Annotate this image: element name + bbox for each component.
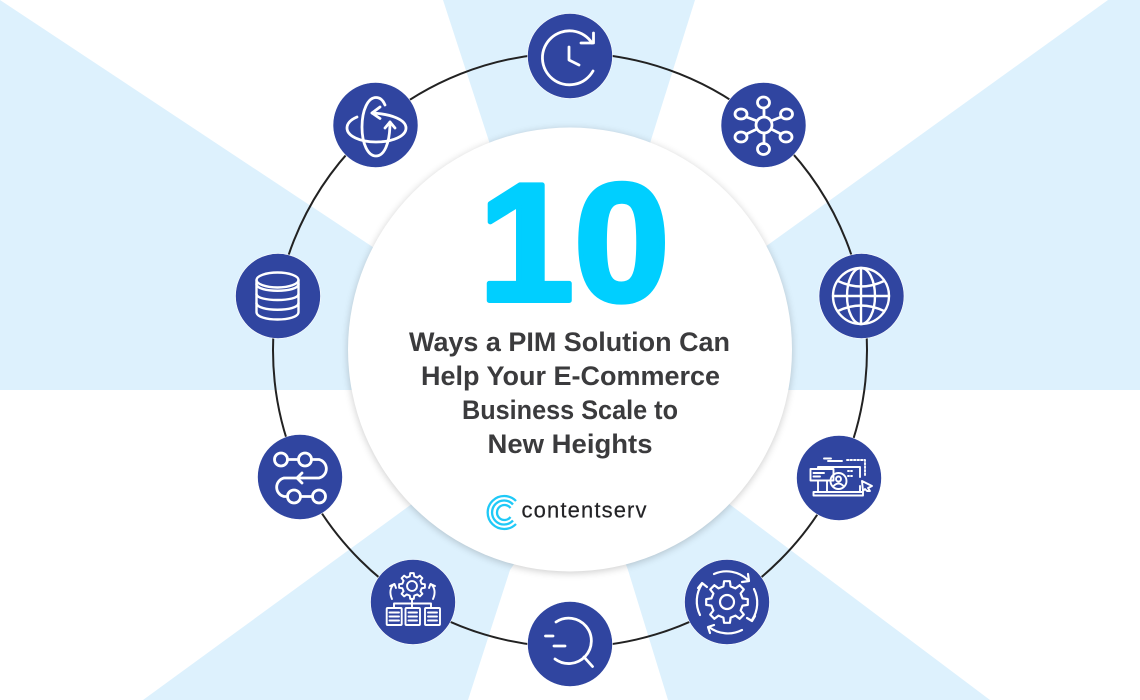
icon: workflow path — [258, 434, 342, 520]
logo: contentserv: contentserv — [522, 498, 646, 522]
icon: network hub — [721, 82, 806, 168]
icon: clock with arrow — [528, 14, 612, 98]
ring connecting icons — [273, 53, 867, 647]
icon: gear with rotating arrows — [684, 560, 770, 644]
big number 10: 10 — [478, 148, 670, 336]
icon: rotation orbit — [333, 82, 418, 168]
heading: Ways a PIM Solution Can — [409, 327, 730, 357]
heading: New Heights — [488, 429, 652, 459]
heading: Help Your E-Commerce — [421, 361, 720, 391]
icon: gear with data sheets — [370, 560, 456, 644]
heading: Business Scale to — [462, 395, 678, 425]
icon: presentation on laptop — [796, 436, 882, 520]
logo: contentserv — [488, 496, 646, 529]
icon: database — [236, 254, 320, 338]
central panel — [348, 128, 792, 573]
icon: magnifier search — [528, 602, 612, 686]
icon: globe — [819, 254, 904, 338]
heading — [409, 327, 730, 459]
